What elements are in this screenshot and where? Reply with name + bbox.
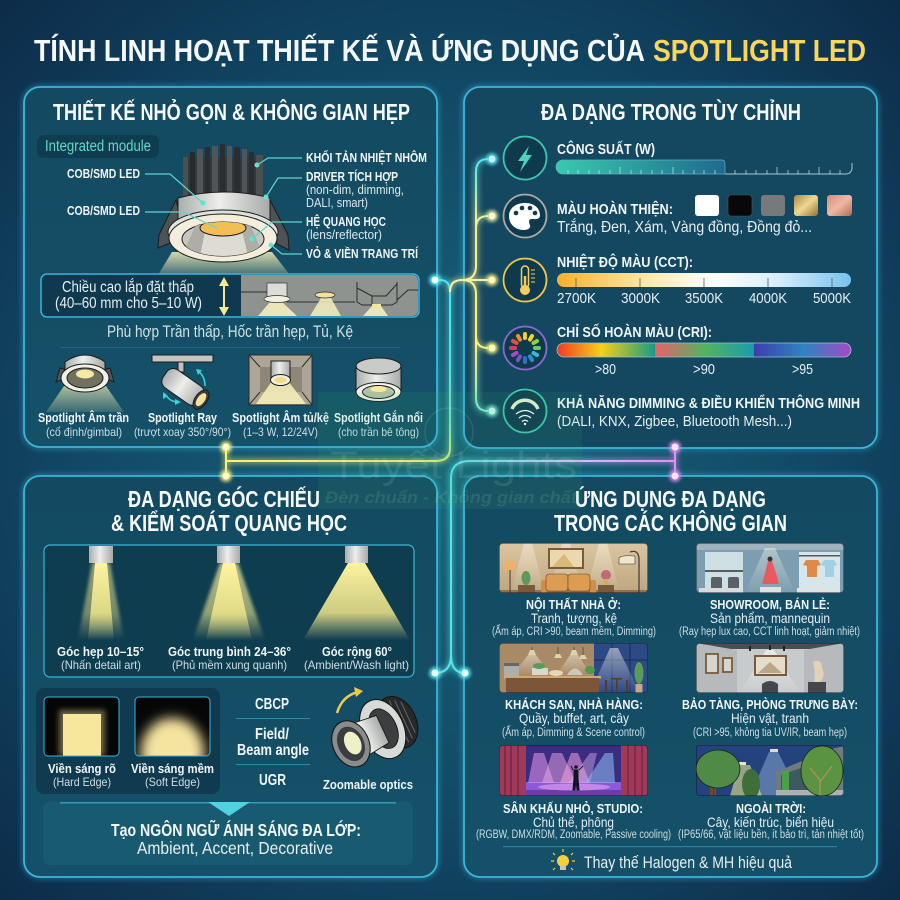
icon: cabinet spotlight [249,355,312,405]
beam angle comparison box [44,545,414,677]
caption: hotel restaurant: (Ấm áp, Dimming & Scene control) [502,726,645,739]
scene: home interior [499,543,648,593]
caption: outdoor: (IP65/66, vật liệu bền, ít bảo trì, tản nhiệt tốt) [678,829,864,841]
callout labels: right: HỆ QUANG HỌC [306,214,386,229]
connector network [220,153,681,679]
tag: integrated module: Integrated module [45,138,151,155]
caption: home interior: Tranh, tượng, kệ [531,610,617,626]
colour temperature scale: 2700K [557,290,596,307]
icon: light bulb [551,849,575,870]
spotlight type labels: Spotlight Âm trần [38,410,129,425]
heading: beam angles: & KIỂM SOÁT QUANG HỌC [111,509,347,536]
icon: height arrow [219,277,229,316]
caption: museum gallery: BẢO TÀNG, PHÒNG TRƯNG BÀY: [682,697,858,712]
colour temperature scale: NHIỆT ĐỘ MÀU (CCT): [557,253,693,271]
optical metrics: Beam angle [237,742,309,759]
wide beam [303,546,410,672]
CRI scale: >90 [693,361,715,378]
medium beam: (Phủ mềm xung quanh) [172,658,287,672]
low installation height strip [41,274,419,317]
panel: compact design [24,87,437,447]
narrow beam [57,546,144,672]
colour temperature scale: 4000K [749,290,787,307]
caption: outdoor: Cây, kiến trúc, biển hiệu [707,814,834,830]
scene: showroom [696,543,844,593]
icon: surface mounted [356,358,401,402]
caption: home interior: NỘI THẤT NHÀ Ở: [526,597,621,612]
callout labels: right: KHỐI TẢN NHIỆT NHÔM [306,150,427,165]
CRI scale: CHỈ SỐ HOÀN MÀU (CRI): [557,323,712,341]
callout labels: left [67,166,140,218]
caption: stage studio [476,801,671,841]
caption: museum gallery: (CRI >95, không tia UV/IR, beam hẹp) [693,727,847,739]
halogen replacement note [551,849,792,872]
medium beam [168,546,291,672]
scene: museum gallery [696,643,844,693]
medium beam: Góc trung bình 24–36° [168,644,291,659]
finish colours [557,195,852,236]
caption: showroom: Sản phẩm, mannequin [710,610,830,626]
layered light language banner [43,802,413,865]
illustration: recessed spotlight [145,144,302,275]
finish colours: MÀU HOÀN THIỆN: [557,200,673,218]
heading: applications: ỨNG DỤNG ĐA DẠNG [575,485,766,512]
finish colours: Trắng, Đen, Xám, Vàng đồng, Đồng đỏ... [557,217,812,236]
caption: outdoor: NGOÀI TRỜI: [736,801,806,816]
colour temperature scale [557,253,851,307]
icon: smart dimming [504,390,546,432]
icon: track spotlight [152,355,213,412]
optical metrics: Field/ [255,726,290,743]
suitability text: Phù hợp Trần thấp, Hốc trần hẹp, Tủ, Kệ [107,323,353,341]
icon: colour wheel [504,326,546,370]
callout labels: left: COB/SMD LED [67,203,140,218]
caption: hotel restaurant: KHÁCH SẠN, NHÀ HÀNG: [505,697,643,712]
caption: museum gallery [682,697,858,739]
dimming text [557,394,860,430]
callout labels: right [306,150,427,261]
colour temperature scale: 3000K [621,290,660,307]
callout labels: right: (non-dim, dimming, [306,182,404,197]
icon: zoomable optics: Zoomable optics [323,777,413,792]
callout labels: right: DALI, smart) [306,195,368,210]
spotlight type labels: (trượt xoay 350°/90°) [134,425,231,439]
icon: thermometer [504,258,546,302]
callout labels: right: DRIVER TÍCH HỢP [306,169,398,184]
scene: hotel restaurant [499,643,648,693]
caption: outdoor [678,801,864,841]
spotlight type labels: (cho trần bê tông) [338,425,419,439]
optical metrics [236,696,310,789]
caption: museum gallery: Hiện vật, tranh [731,710,809,726]
soft edge sample: Viền sáng mềm [131,761,214,776]
caption: hotel restaurant [502,697,645,739]
optical metrics: CBCP [255,696,289,713]
colour temperature scale: 5000K [813,290,851,307]
icon: palette [504,194,546,238]
colour temperature scale: 3500K [685,290,723,307]
spotlight type labels [38,410,423,439]
low installation height strip: Chiều cao lắp đặt thấp [62,279,194,296]
icon: power [504,136,546,180]
wide beam: Góc rộng 60° [322,644,392,659]
hard edge sample: Viền sáng rõ [48,761,116,776]
caption: home interior [492,597,656,638]
callout labels: right: (lens/reflector) [306,227,382,242]
caption: showroom [679,597,860,638]
heading: compact design: THIẾT KẾ NHỎ GỌN & KHÔNG GIAN HẸP [53,97,410,125]
panel: applications [464,476,877,877]
caption: stage studio: SÂN KHẤU NHỎ, STUDIO: [503,801,643,816]
spotlight type labels: Spotlight Âm tủ/kệ [232,410,329,425]
heading: applications: TRONG CÁC KHÔNG GIAN [554,509,787,536]
heading: applications [554,485,787,536]
icon: recessed ceiling [46,355,124,412]
narrow beam: Góc hẹp 10–15° [57,644,144,659]
power scale: CÔNG SUẤT (W) [557,140,655,158]
spotlight type labels: Spotlight Gắn nổi [334,410,423,425]
CRI scale: >95 [792,361,813,378]
icon: zoomable optics [322,686,428,792]
scene: stage studio [499,745,648,796]
watermark [318,392,582,509]
heading: beam angles [111,485,347,536]
CRI scale [557,323,851,378]
scene: outdoor [696,745,844,799]
hard edge sample [44,697,119,789]
dimming text: (DALI, KNX, Zigbee, Bluetooth Mesh...) [557,413,792,430]
narrow beam: (Nhấn detail art) [61,658,141,672]
spotlight type labels: (1–3 W, 12/24V) [243,425,318,439]
spotlight type labels: Spotlight Ray [148,410,218,425]
layered light language banner: Tạo NGÔN NGỮ ÁNH SÁNG ĐA LỚP: [111,819,361,840]
spotlight type labels: (cố định/gimbal) [46,425,122,439]
edge comparison panel [36,688,220,794]
caption: stage studio: Chủ thể, phông [533,814,614,830]
title: TÍNH LINH HOẠT THIẾT KẾ VÀ ỨNG DỤNG CỦA [34,32,645,68]
low installation height strip: (40–60 mm cho 5–10 W) [55,295,202,312]
title: SPOTLIGHT LED [653,33,866,68]
heading: customisation: ĐA DẠNG TRONG TÙY CHỈNH [541,97,801,125]
hard edge sample: (Hard Edge) [53,775,111,789]
callout labels: right: VỎ & VIỀN TRANG TRÍ [306,246,418,261]
wide beam: (Ambient/Wash light) [304,658,409,672]
watermark: Tuyết Lights [330,445,577,487]
panel: customisation [464,87,877,448]
heading: beam angles: ĐA DẠNG GÓC CHIẾU [128,485,320,512]
tag: integrated module [37,135,159,158]
callout labels: left: COB/SMD LED [67,166,140,181]
halogen replacement note: Thay thế Halogen & MH hiệu quả [584,853,792,872]
caption: home interior: (Ấm áp, CRI >90, beam mềm, Dimming) [492,625,656,638]
dimming text: KHẢ NĂNG DIMMING & ĐIỀU KHIỂN THÔNG MINH [557,394,860,412]
caption: showroom: (Ray hẹp lux cao, CCT linh hoạt, giảm nhiệt) [679,626,860,638]
optical metrics: UGR [259,772,286,789]
watermark: Đèn chuẩn - Không gian chất [325,488,578,507]
caption: hotel restaurant: Quầy, buffet, art, cây [519,710,629,726]
soft edge sample [131,697,214,789]
power scale [556,140,852,174]
panel: beam angles [24,476,437,877]
layered light language banner: Ambient, Accent, Decorative [137,838,333,858]
soft edge sample: (Soft Edge) [145,775,200,789]
CRI scale: >80 [595,361,616,378]
caption: showroom: SHOWROOM, BÁN LẺ: [710,597,830,612]
caption: stage studio: (RGBW, DMX/RDM, Zoomable, Passive cooling) [476,829,671,841]
